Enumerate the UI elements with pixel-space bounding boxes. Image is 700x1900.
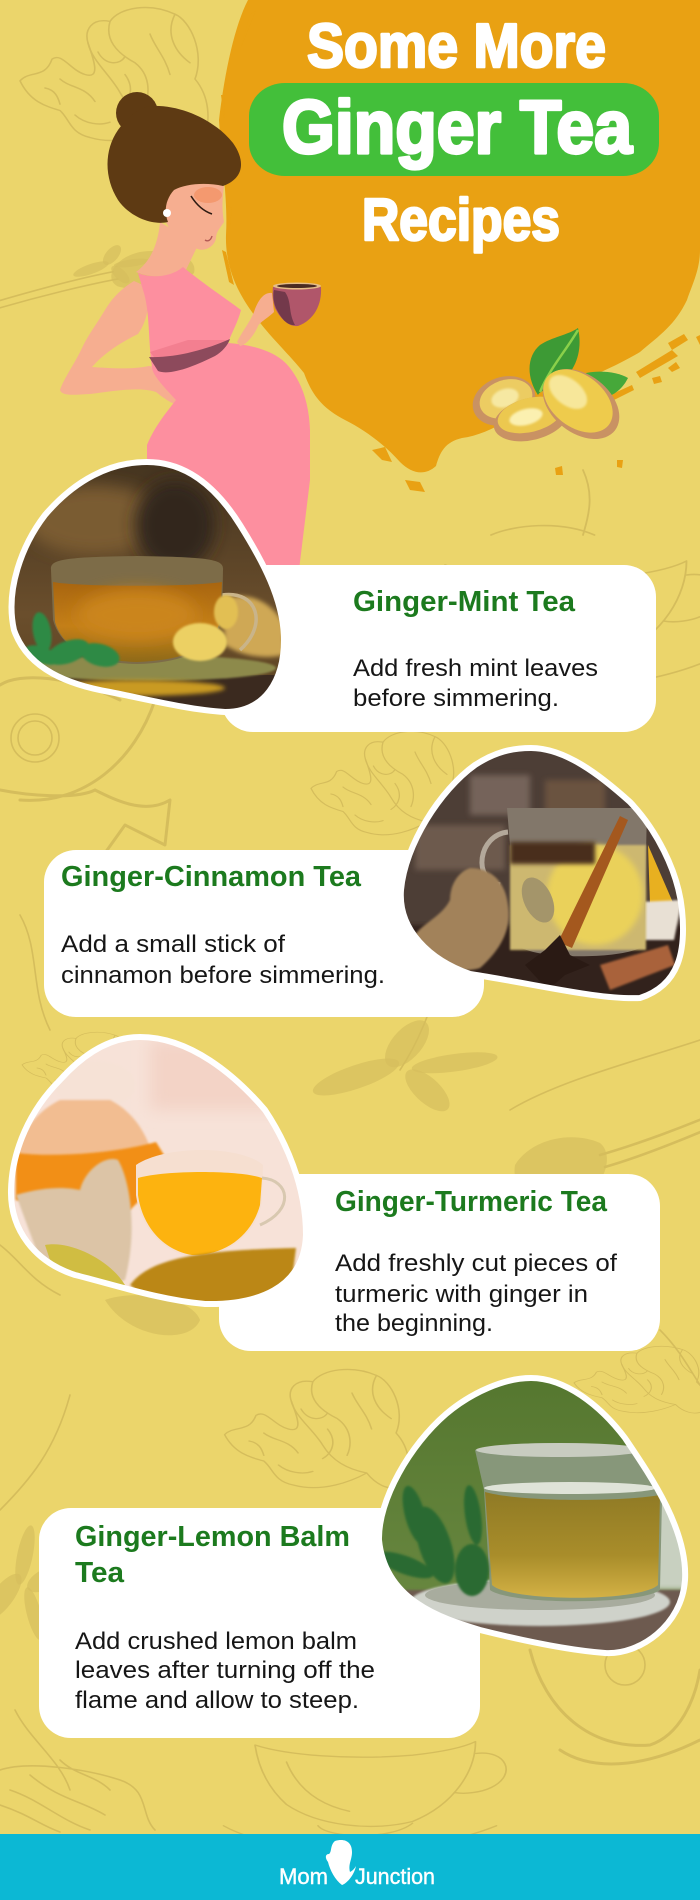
- glass: [507, 808, 647, 956]
- panel: Ginger-Mint Tea card: [221, 565, 656, 732]
- glass handle: [482, 832, 508, 885]
- neck: [136, 222, 198, 276]
- cinnamon stick: [558, 816, 628, 948]
- handle: [222, 595, 256, 650]
- text: Ginger-Lemon Balm Tea: Ginger-Lemon Balm: [75, 1521, 350, 1553]
- text: Ginger-Cinnamon Tea: Add a small stick of: [61, 931, 285, 958]
- photo: ginger-turmeric tea: [5, 1030, 310, 1310]
- title line: Recipes: Recipes: [362, 187, 560, 253]
- text: Ginger-Mint Tea: [353, 586, 598, 712]
- text: Ginger-Turmeric Tea: Add freshly cut pieces of: [335, 1250, 617, 1277]
- panel: Ginger-Cinnamon Tea card: [44, 850, 484, 1017]
- teapot: [16, 1100, 156, 1200]
- text: Ginger-Cinnamon Tea: Ginger-Cinnamon Tea: [61, 861, 362, 893]
- sketch: herbs bottom left: [0, 1710, 155, 1832]
- slice left: [466, 368, 542, 434]
- title line: Some More: Some More: [307, 12, 606, 81]
- text: Ginger-Cinnamon Tea: cinnamon before simmering.: [61, 962, 385, 989]
- orange brush blob: [219, 0, 700, 492]
- leaf right: [586, 372, 628, 397]
- text: Ginger-Turmeric Tea: [335, 1186, 617, 1337]
- slice middle: [489, 389, 573, 449]
- text: Ginger-Lemon Balm Tea: flame and allow to steep.: [75, 1687, 359, 1714]
- footer logo: [279, 1840, 435, 1889]
- back arm: [60, 281, 177, 404]
- text: Ginger-Lemon Balm Tea: leaves after turning off the: [75, 1657, 375, 1684]
- belt: [149, 339, 230, 372]
- saucer: [410, 1578, 670, 1626]
- logo icon: [326, 1840, 356, 1885]
- panel: Ginger-Turmeric Tea card: [219, 1174, 660, 1351]
- text: Ginger-Turmeric Tea: turmeric with ginger in: [335, 1281, 588, 1308]
- face: [165, 182, 224, 250]
- text: Ginger-Cinnamon Tea: [61, 861, 385, 989]
- tea: [485, 1492, 660, 1598]
- title group: [249, 12, 659, 253]
- title pill: Ginger Tea: [282, 85, 633, 169]
- text: Ginger-Lemon Balm Tea: Add crushed lemon balm: [75, 1628, 357, 1655]
- tea: [53, 582, 222, 662]
- mint: [22, 611, 122, 671]
- illustration: pregnant woman with cup: [60, 92, 321, 570]
- teapot lid: [55, 1061, 135, 1109]
- photo: ginger-mint tea: [0, 455, 290, 720]
- glass: [475, 1443, 662, 1601]
- star anise: [526, 935, 589, 984]
- sketch: thin lines: [0, 915, 700, 1510]
- mouth: [205, 236, 212, 241]
- footer logo: Junction: [355, 1864, 435, 1889]
- text: Ginger-Lemon Balm Tea: [75, 1521, 375, 1714]
- photo: ginger-cinnamon tea: [395, 745, 690, 1005]
- dress: [138, 267, 310, 570]
- bowl: [644, 898, 680, 942]
- background ginger: [222, 596, 284, 657]
- text: Ginger-Turmeric Tea: the beginning.: [335, 1310, 493, 1337]
- footer bar: [0, 1834, 700, 1900]
- photo: ginger-lemon balm tea: [374, 1375, 690, 1660]
- ginger slices and leaves: [466, 328, 633, 453]
- ginger slice: [173, 623, 227, 661]
- turmeric: [130, 1248, 296, 1310]
- saucer: [20, 655, 276, 681]
- cheek: [194, 187, 222, 203]
- eye: [191, 196, 212, 214]
- sketch: teapot ring left: [0, 678, 170, 860]
- earring: [163, 209, 171, 217]
- tea glass: [136, 1154, 173, 1204]
- ginger root: [410, 868, 509, 970]
- leaves: [374, 1483, 489, 1596]
- front arm: [237, 293, 274, 346]
- text: Ginger-Mint Tea: Ginger-Mint Tea: [353, 586, 576, 618]
- text: Ginger-Lemon Balm Tea: Tea: [75, 1557, 125, 1589]
- handle: [260, 1178, 285, 1225]
- text: Ginger-Mint Tea: Add fresh mint leaves: [353, 655, 598, 682]
- panel: Ginger-Lemon Balm Tea card: [39, 1508, 480, 1738]
- slice right: [529, 355, 633, 453]
- text: Ginger-Mint Tea: before simmering.: [353, 685, 559, 712]
- ginger root: [16, 1159, 132, 1290]
- leaf top: [530, 328, 580, 395]
- cinnamon bottom: [600, 945, 675, 990]
- cup: [273, 282, 321, 326]
- footer logo: Mom: [279, 1864, 328, 1889]
- hair bun: [116, 92, 158, 134]
- sketch: teapot ring right: [530, 1645, 700, 1764]
- blob splatter: [221, 10, 700, 492]
- text: Ginger-Turmeric Tea: Ginger-Turmeric Tea: [335, 1186, 608, 1218]
- dress highlight: [150, 340, 228, 365]
- hair: [108, 106, 241, 223]
- lemon wedge: [648, 845, 674, 905]
- glass: [51, 556, 223, 664]
